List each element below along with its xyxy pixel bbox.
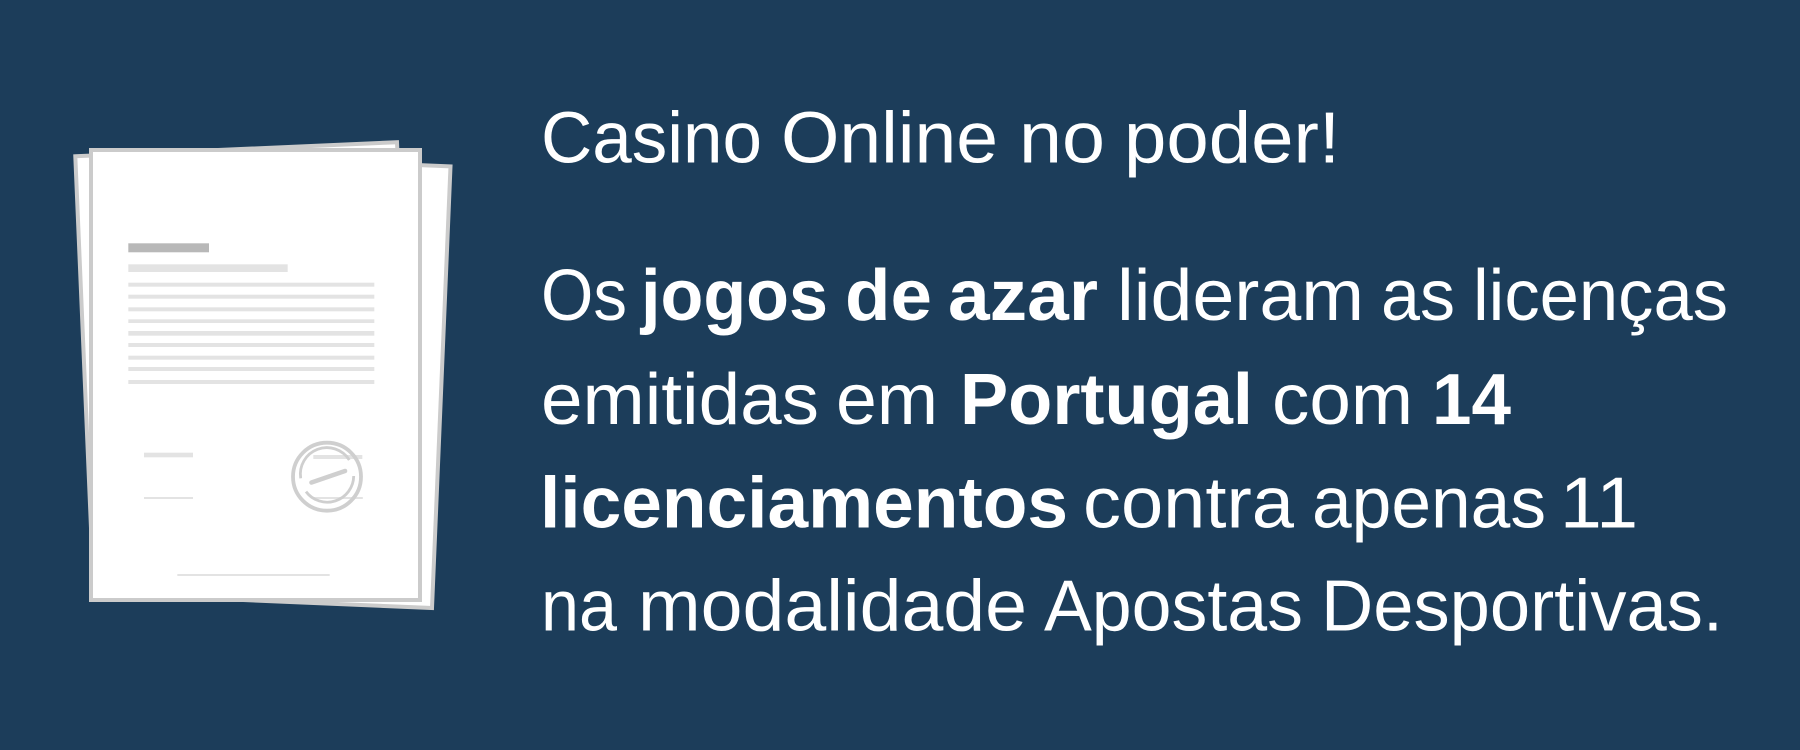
line 3: 11: [1560, 463, 1638, 543]
document subheading bar: [128, 264, 288, 272]
line 1: Os: [541, 256, 627, 336]
line 2: 14: [1432, 360, 1511, 440]
title: Online: [781, 99, 998, 179]
line 3: apenas: [1312, 463, 1546, 543]
line 1: jogos: [639, 256, 828, 336]
icon: stamp: [293, 443, 361, 511]
line 2: emitidas: [541, 360, 819, 440]
line 1: as: [1381, 256, 1455, 336]
line 2: com: [1272, 360, 1413, 440]
line 1: licenças: [1473, 256, 1728, 336]
line 4: Apostas: [1044, 567, 1303, 647]
line 4: Desportivas.: [1321, 567, 1723, 647]
title: Casino: [541, 99, 762, 179]
back page left: [75, 142, 416, 592]
line 1: de: [845, 256, 932, 336]
line 1: lideram: [1117, 256, 1364, 336]
line 3: contra: [1083, 463, 1295, 543]
icon: stack of documents: [75, 142, 451, 608]
line 4: modalidade: [638, 567, 1027, 647]
line 3: licenciamentos: [540, 463, 1068, 543]
back page right: [110, 153, 450, 608]
line 1: azar: [948, 256, 1098, 336]
front page: [91, 150, 420, 600]
signature lines: [144, 453, 363, 576]
line 4: na: [541, 567, 618, 647]
body text: [540, 256, 1728, 647]
title: no: [1019, 99, 1105, 179]
line 2: Portugal: [960, 360, 1253, 440]
document heading bar: [128, 243, 209, 252]
document text lines: [128, 283, 374, 384]
title: poder!: [1124, 99, 1340, 179]
line 2: em: [836, 360, 938, 440]
